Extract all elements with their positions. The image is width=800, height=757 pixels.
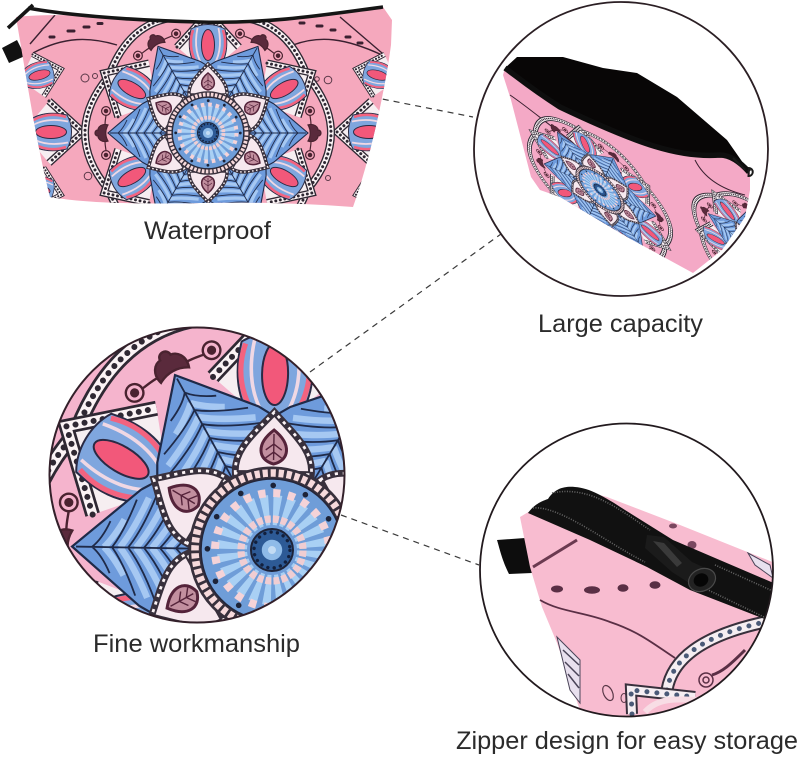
circle outline: [474, 2, 768, 296]
circle outline: [480, 424, 773, 716]
connector: fine workmanship circle to zipper circle: [341, 515, 479, 565]
zipper band: [528, 486, 772, 619]
label: Fine workmanship: Fine workmanship: [93, 630, 300, 658]
chain pattern: [631, 622, 765, 714]
bag body with mandala print: [16, 7, 392, 207]
zipper teeth: [533, 491, 775, 620]
zipper slider: [646, 535, 703, 582]
printed lines and dots on bag: [533, 524, 773, 703]
icon: side tab: [497, 538, 532, 574]
zipper close-up photo: [497, 486, 772, 716]
panel: large capacity circle: [473, 1, 769, 297]
bag front with print: [503, 70, 750, 273]
open bag photo: [503, 57, 754, 273]
label: Waterproof: Waterproof: [144, 217, 271, 245]
close-up mandala print: [50, 328, 344, 622]
icon: bag side tab: [2, 40, 25, 63]
zipper: [8, 5, 383, 28]
zipper pull: [733, 158, 753, 176]
bag body: [520, 495, 772, 716]
zipper band: [505, 68, 749, 172]
connector: waterproof bag to large capacity circle: [372, 97, 473, 117]
connector: large capacity circle to fine workmanship circle: [310, 234, 501, 372]
circle outline: [50, 328, 344, 622]
panel: zipper design circle: [480, 424, 790, 730]
label: Zipper design for easy storage: Zipper design for easy storage: [456, 727, 798, 755]
bag interior: [505, 57, 748, 170]
label: Large capacity: Large capacity: [538, 310, 703, 338]
panel: fine workmanship circle: [48, 326, 346, 624]
panel: waterproof bag photo: [2, 4, 392, 207]
